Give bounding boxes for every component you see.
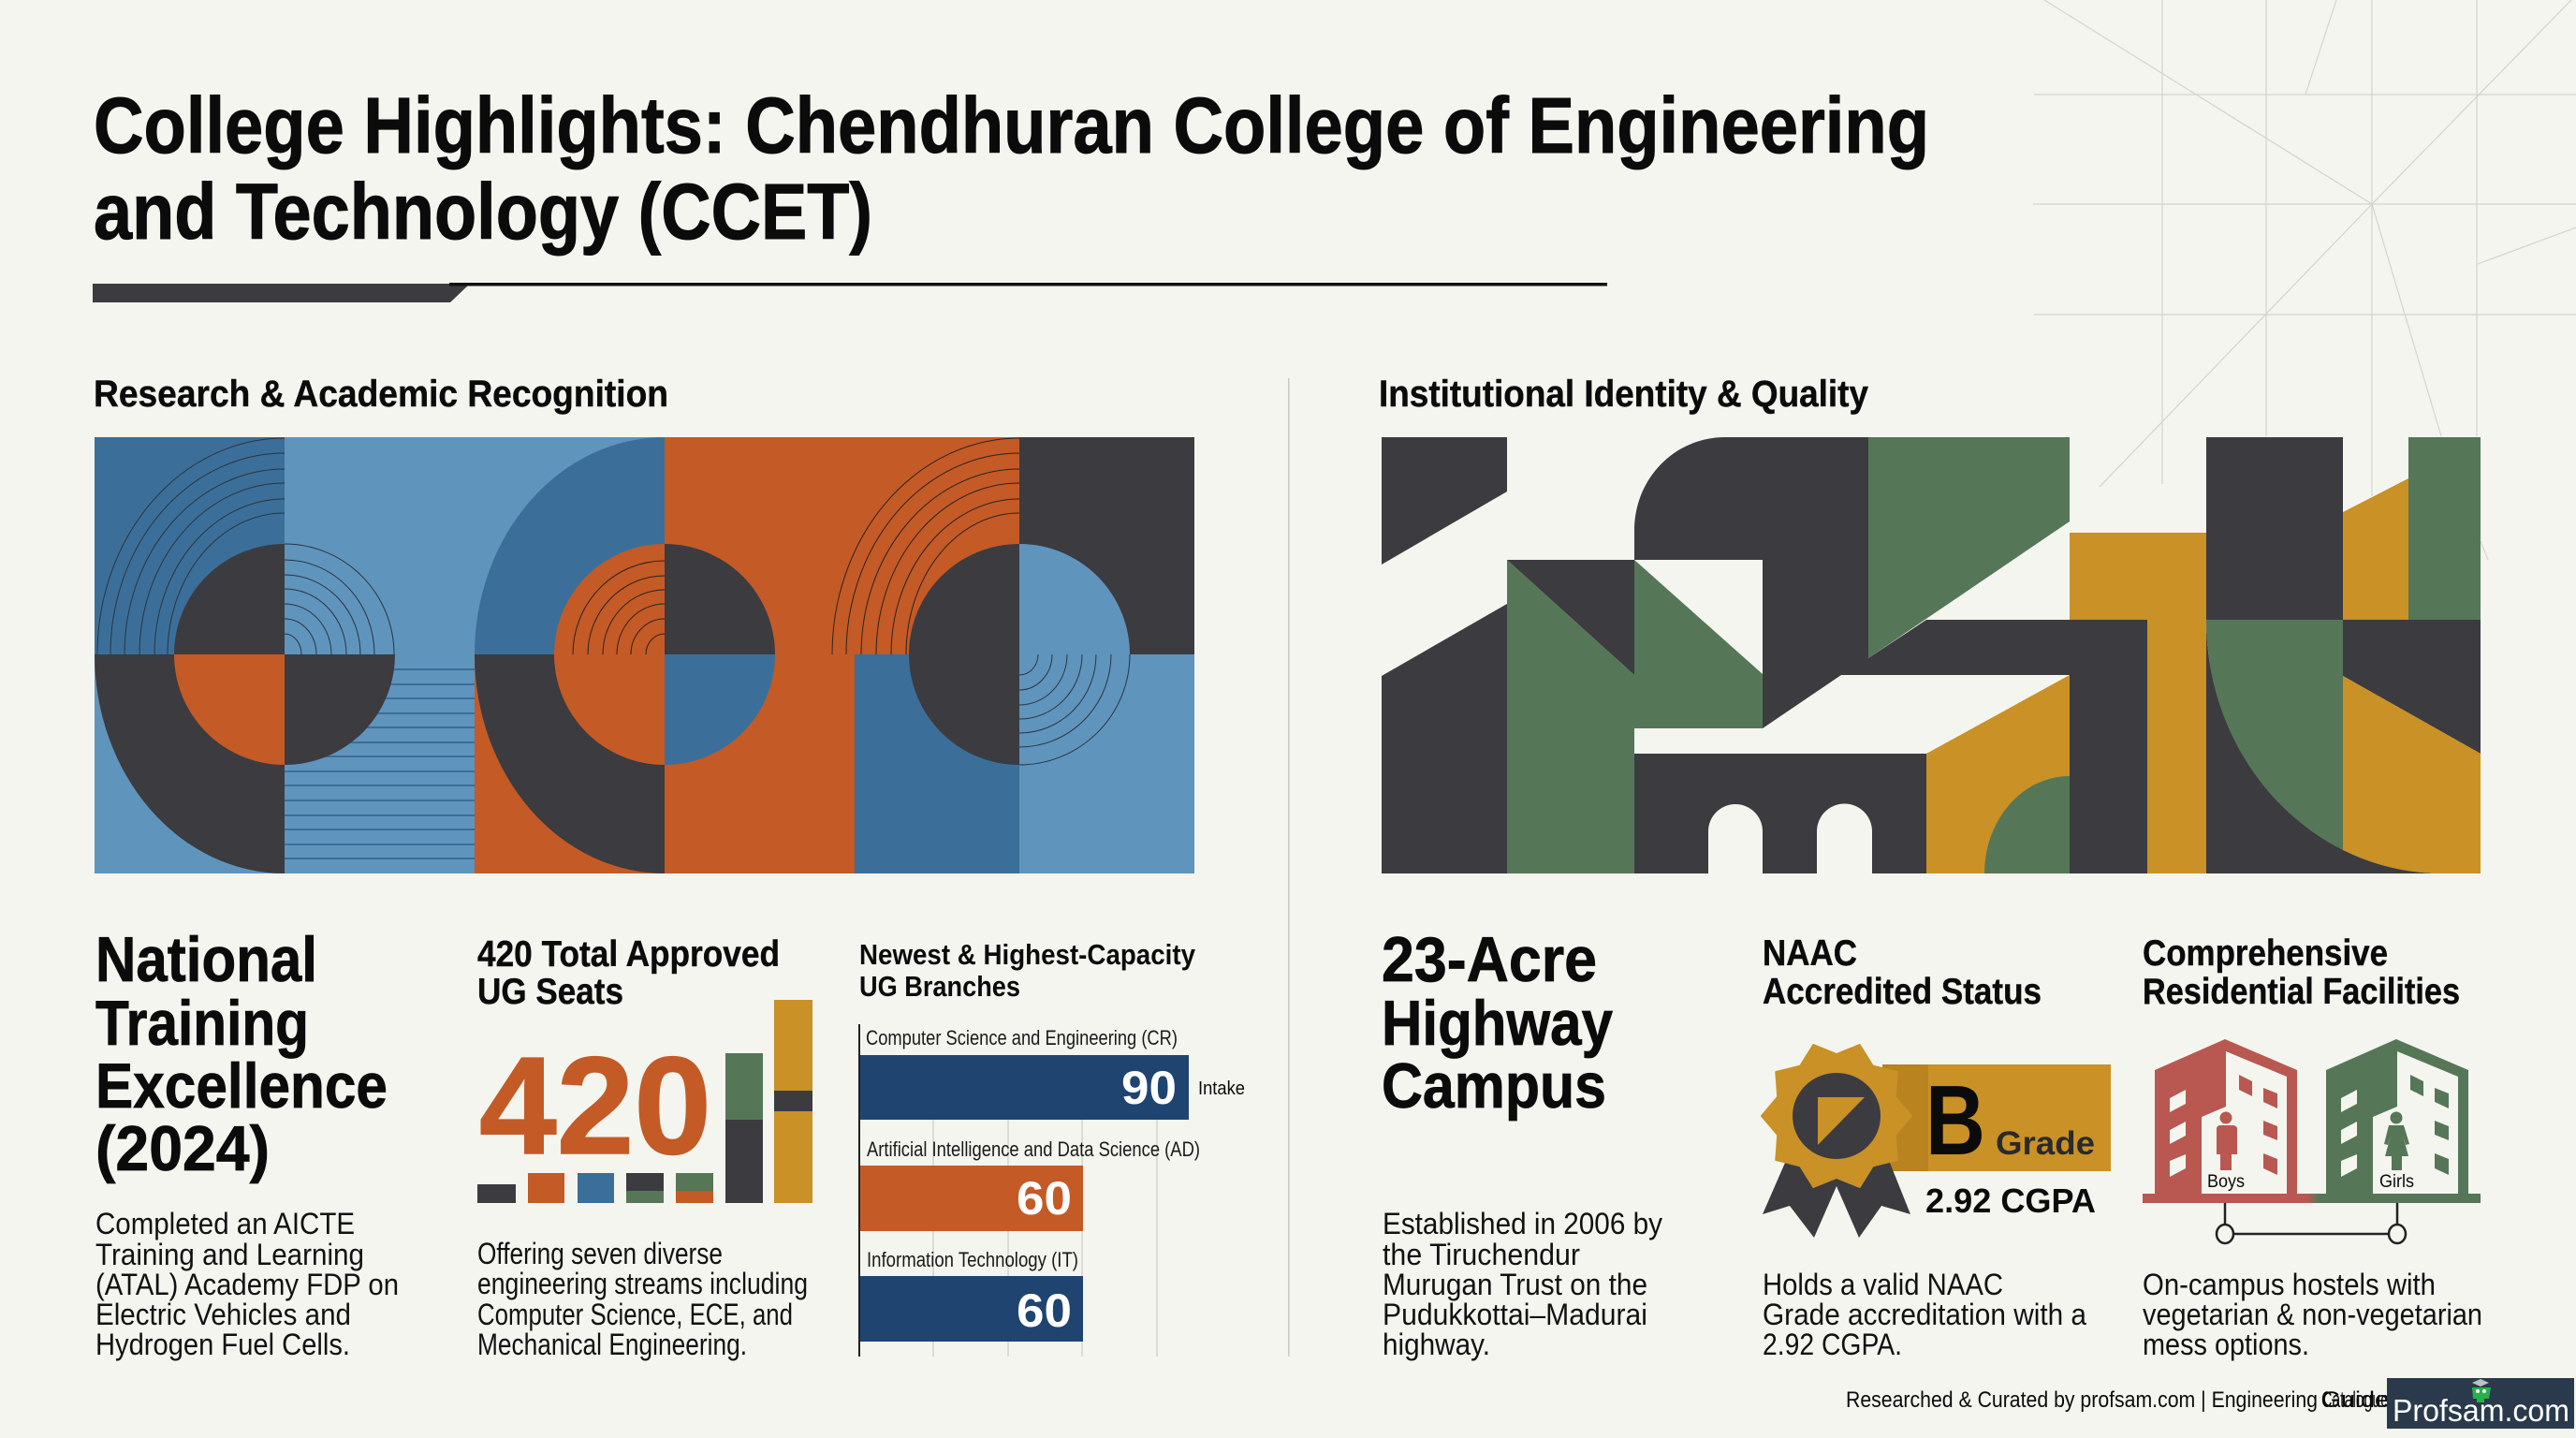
icon: boys hostel: Boys: [2207, 1172, 2245, 1192]
text block: 23-acre highway campus: Murugan Trust on the: [1383, 1268, 1647, 1301]
icon: mascot with graduation cap: [2472, 1379, 2491, 1402]
heading: newest and highest capacity branches: [859, 938, 1196, 1003]
heading: newest and highest capacity branches: UG Branches: [859, 970, 1020, 1003]
footer credit: Catalogue: [2321, 1387, 2389, 1413]
text block: national training excellence: (2024): [95, 1113, 270, 1184]
title: College Highlights: Chendhuran College of Engineering: [94, 81, 1929, 169]
icon: NAAC grade badge with medal: 2.92 CGPA: [1925, 1181, 2096, 1220]
logo: Profsam.com: Profsam.com: [2393, 1393, 2569, 1428]
big number: 420: 420: [479, 1029, 711, 1183]
text block: 420 approved seats heading: 420 Total Approved: [477, 934, 780, 975]
text block: national training excellence: Training and Learning: [95, 1238, 364, 1271]
heading: NAAC accredited status: Accredited Status: [1763, 972, 2042, 1012]
icon: NAAC grade badge with medal: Grade: [1996, 1125, 2095, 1162]
icon: girls hostel: Girls: [2379, 1172, 2414, 1192]
heading: NAAC accredited status: [1763, 933, 2042, 1012]
text block: seven streams description: Computer Science, ECE, and: [477, 1298, 793, 1331]
text block: NAAC description: 2.92 CGPA.: [1763, 1328, 1902, 1361]
bar chart: branch intake: Intake: [1198, 1078, 1245, 1099]
text block: 23-acre highway campus: [1382, 924, 1662, 1361]
icon: boys and girls hostel buildings: [2143, 1039, 2481, 1243]
heading: comprehensive residential facilities: Residential Facilities: [2143, 972, 2460, 1012]
bar chart: branch intake: Information Technology (IT): [867, 1248, 1078, 1271]
text block: 23-acre highway campus: 23-Acre: [1382, 924, 1597, 995]
heading: newest and highest capacity branches: Newest & Highest-Capacity: [859, 938, 1196, 971]
text block: seven streams description: engineering streams including: [477, 1267, 808, 1300]
bar chart: branch intake: [858, 1024, 1245, 1357]
text block: 23-acre highway campus: Pudukkottai–Madurai: [1383, 1298, 1647, 1331]
text block: national training excellence: National: [95, 924, 317, 995]
text block: national training excellence: [95, 924, 399, 1361]
text block: NAAC description: [1763, 1268, 2086, 1361]
text block: 420 approved seats heading: UG Seats: [477, 972, 623, 1012]
bar graphic: seven stream blocks: [477, 1000, 812, 1203]
heading: comprehensive residential facilities: [2143, 933, 2460, 1012]
bar chart: branch intake: 60: [1017, 1172, 1072, 1225]
footer credit: Researched & Curated by profsam.com | Engineering: [1846, 1387, 2318, 1413]
bar chart: branch intake: 90: [1121, 1062, 1177, 1114]
text block: hostels description: mess options.: [2143, 1328, 2309, 1361]
heading: comprehensive residential facilities: Comprehensive: [2143, 933, 2388, 974]
text block: 23-acre highway campus: Campus: [1382, 1050, 1606, 1122]
icon: boys hostel: [2155, 1039, 2297, 1194]
connector between hostels: [2217, 1203, 2406, 1243]
text block: national training excellence: Excellence: [95, 1050, 388, 1122]
heading: research and academic recognition: Research & Academic Recognition: [94, 374, 668, 415]
panel: blue and orange geometric artwork: [95, 437, 1194, 873]
icon: girls hostel: [2326, 1039, 2468, 1194]
footer credit: Guide: [2321, 1387, 2389, 1413]
panel: campus architecture geometric artwork: [1382, 437, 2481, 873]
text block: hostels description: [2143, 1268, 2482, 1361]
text block: seven streams description: [477, 1237, 808, 1361]
title rule: [93, 283, 1607, 302]
bar chart: branch intake: Artificial Intelligence and Data Science (AD): [867, 1137, 1200, 1161]
heading: institutional identity and quality: Institutional Identity & Quality: [1379, 374, 1869, 415]
text block: 23-acre highway campus: the Tiruchendur: [1383, 1238, 1580, 1271]
text block: seven streams description: Offering seven diverse: [477, 1237, 723, 1270]
text block: 23-acre highway campus: highway.: [1383, 1328, 1490, 1361]
logo: Profsam.com: [2387, 1378, 2574, 1429]
text block: national training excellence: Electric Vehicles and: [95, 1298, 351, 1331]
text block: seven streams description: Mechanical Engineering.: [477, 1328, 747, 1361]
text block: 23-acre highway campus: Highway: [1382, 988, 1613, 1059]
text block: hostels description: vegetarian & non-vegetarian: [2143, 1298, 2482, 1331]
text block: 23-acre highway campus: Established in 2006 by: [1383, 1207, 1662, 1240]
text block: 420 approved seats heading: [477, 934, 780, 1012]
bar chart: branch intake: Computer Science and Engineering (CR): [866, 1026, 1178, 1049]
text block: national training excellence: Training: [95, 988, 309, 1059]
icon: NAAC grade badge with medal: B: [1925, 1065, 1985, 1176]
text block: national training excellence: Hydrogen Fuel Cells.: [95, 1328, 350, 1361]
bar chart: branch intake: 60: [1017, 1284, 1072, 1337]
title: [94, 81, 1929, 256]
text block: NAAC description: Holds a valid NAAC: [1763, 1268, 2003, 1301]
icon: NAAC grade badge with medal: [1762, 1045, 2111, 1238]
text block: national training excellence: Completed an AICTE: [95, 1207, 355, 1240]
heading: NAAC accredited status: NAAC: [1763, 933, 1857, 974]
column divider: [1288, 378, 1290, 1357]
text block: national training excellence: (ATAL) Academy FDP on: [95, 1268, 399, 1301]
title: and Technology (CCET): [94, 168, 872, 256]
text block: hostels description: On-campus hostels with: [2143, 1268, 2436, 1301]
text block: NAAC description: Grade accreditation with a: [1763, 1298, 2086, 1331]
